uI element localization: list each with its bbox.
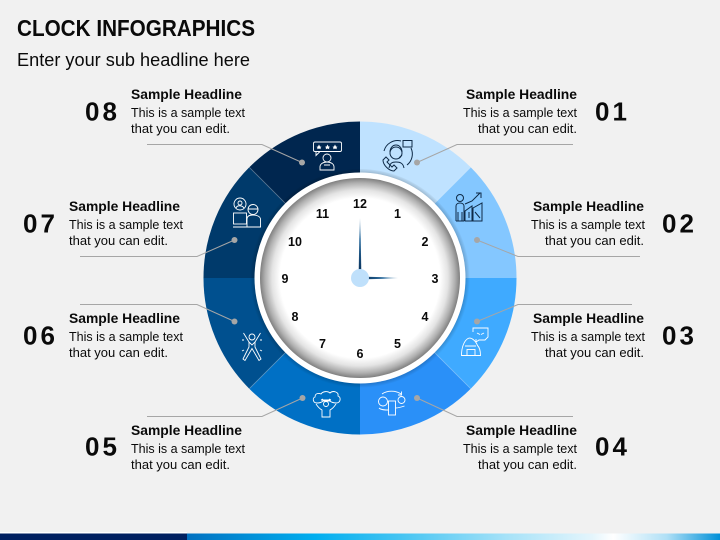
item 04: Sample Headline — [466, 423, 577, 438]
item 08: This is a sample text — [131, 105, 245, 120]
subtitle: Enter your sub headline here — [17, 50, 250, 70]
icon: hooded hacker with laptop — [462, 328, 488, 356]
clock numerals: 6 — [357, 347, 364, 361]
item 05: Sample Headline — [131, 423, 242, 438]
item 08: 08 — [85, 96, 117, 126]
icon: money transfer by phone — [378, 391, 405, 415]
clock numerals: 11 — [316, 207, 329, 221]
clock hands — [351, 218, 398, 287]
clock numerals: 8 — [292, 310, 299, 324]
item 07 — [23, 199, 238, 256]
item 02: This is a sample text — [531, 217, 645, 232]
item 01: This is a sample text — [463, 105, 577, 120]
item 04 — [414, 395, 628, 472]
clock numerals: 1 — [394, 207, 401, 221]
clock numerals: 9 — [282, 272, 289, 286]
item 06 — [23, 304, 238, 360]
clock numerals: 5 — [394, 337, 401, 351]
item 07: that you can edit. — [69, 233, 168, 248]
clock numerals: 12 — [353, 197, 367, 211]
item 02: Sample Headline — [533, 199, 644, 214]
clock numerals: 2 — [422, 235, 429, 249]
icon: customer with star review — [314, 142, 342, 170]
icon: person lifting cloud — [313, 392, 340, 417]
item 03: that you can edit. — [545, 345, 644, 360]
item 05: This is a sample text — [131, 441, 245, 456]
icon: person with raised arms — [242, 333, 262, 360]
item 07: This is a sample text — [69, 217, 183, 232]
item 01: Sample Headline — [466, 87, 577, 102]
item 01 — [414, 87, 627, 166]
item 03: 03 — [662, 320, 694, 350]
item 07: 07 — [23, 208, 55, 238]
clock numerals: 7 — [319, 337, 326, 351]
clock numerals: 4 — [422, 310, 429, 324]
item 07: Sample Headline — [69, 199, 180, 214]
item 01: that you can edit. — [478, 121, 577, 136]
item 03: This is a sample text — [531, 329, 645, 344]
item 05: that you can edit. — [131, 457, 230, 472]
item 01: 01 — [595, 96, 627, 126]
item 06: that you can edit. — [69, 345, 168, 360]
icon: support staff and computer — [233, 198, 261, 227]
item 08: Sample Headline — [131, 87, 242, 102]
item 02: 02 — [662, 208, 694, 238]
clock face — [250, 169, 470, 389]
item 04: that you can edit. — [478, 457, 577, 472]
icon: businessman and growth chart — [456, 193, 482, 221]
item 06: This is a sample text — [69, 329, 183, 344]
item 05 — [85, 395, 306, 472]
item 08: that you can edit. — [131, 121, 230, 136]
item 02 — [474, 199, 694, 256]
clock numerals: 10 — [288, 235, 302, 249]
title: CLOCK INFOGRAPHICS — [17, 15, 255, 41]
footer colour bar — [0, 532, 720, 540]
clock ring: eight coloured segments — [203, 121, 517, 435]
item 05: 05 — [85, 432, 117, 462]
item 08 — [85, 87, 305, 166]
item 04: This is a sample text — [463, 441, 577, 456]
item 03: Sample Headline — [533, 311, 644, 326]
item 03 — [474, 304, 694, 360]
icon: call centre agent — [383, 140, 412, 171]
item 06: Sample Headline — [69, 311, 180, 326]
item 02: that you can edit. — [545, 233, 644, 248]
clock numerals — [282, 197, 439, 361]
clock numerals: 3 — [432, 272, 439, 286]
item 04: 04 — [595, 432, 628, 462]
item 06: 06 — [23, 320, 55, 350]
